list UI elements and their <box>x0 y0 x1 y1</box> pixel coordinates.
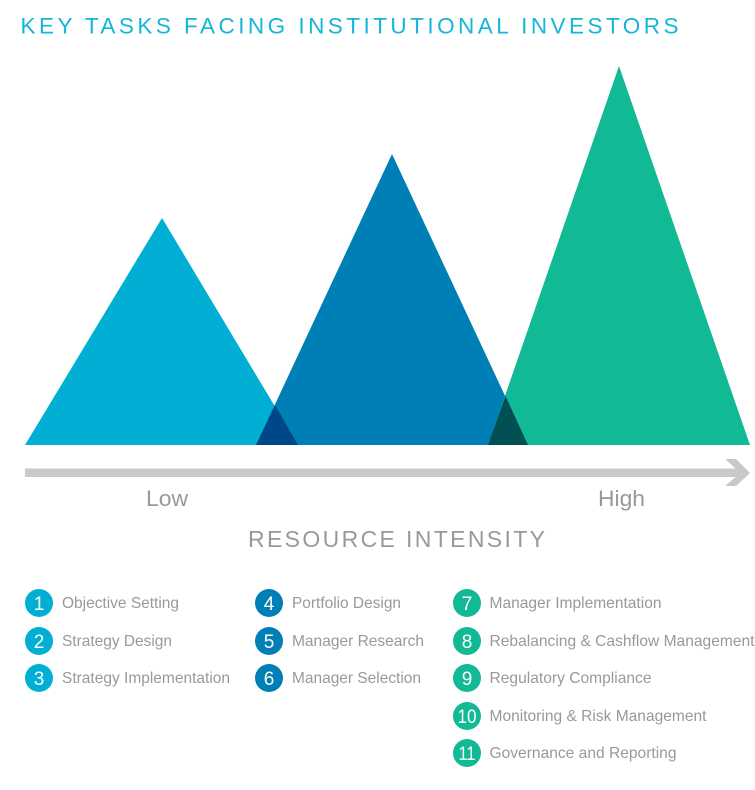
axis label: low: Low <box>146 486 188 511</box>
legend item 4: 4 <box>264 594 275 615</box>
high intensity triangle <box>488 66 750 445</box>
legend column 1 <box>25 589 230 692</box>
axis title: RESOURCE INTENSITY <box>248 526 545 552</box>
legend item 11 <box>453 739 676 767</box>
legend item 10 <box>453 702 707 730</box>
legend item 2: 2 <box>34 632 44 653</box>
legend item 9: Regulatory Compliance <box>490 670 652 687</box>
legend item 9: 9 <box>462 669 472 690</box>
legend item 4: Portfolio Design <box>292 595 401 612</box>
legend column 2 <box>255 589 424 692</box>
legend item 6: Manager Selection <box>292 670 421 687</box>
legend item 6: 6 <box>264 669 274 690</box>
legend item 2 <box>25 627 172 655</box>
legend item 6 <box>255 664 421 692</box>
title: KEY TASKS FACING INSTITUTIONAL INVESTORS <box>20 14 679 38</box>
legend item 4 <box>255 589 401 617</box>
legend item 1: Objective Setting <box>62 595 179 612</box>
axis label: high: High <box>598 486 645 511</box>
legend item 7: Manager Implementation <box>490 595 662 612</box>
legend item 10: 10 <box>458 707 476 728</box>
legend item 1: 1 <box>34 594 44 615</box>
legend item 5: 5 <box>264 632 274 653</box>
legend item 2: Strategy Design <box>62 633 172 650</box>
legend item 3: 3 <box>34 669 44 690</box>
legend item 9 <box>453 664 652 692</box>
legend item 11: 11 <box>458 744 476 765</box>
legend item 8: 8 <box>462 632 472 653</box>
legend item 10: Monitoring & Risk Management <box>490 708 707 725</box>
medium intensity triangle <box>256 154 528 445</box>
legend item 11: Governance and Reporting <box>490 745 676 762</box>
legend item 8: Rebalancing & Cashflow Management <box>490 633 755 650</box>
legend item 7 <box>453 589 662 617</box>
legend item 3: Strategy Implementation <box>62 670 230 687</box>
legend item 3 <box>25 664 230 692</box>
low intensity triangle <box>25 218 298 445</box>
triangle chart <box>25 66 750 445</box>
legend item 5: Manager Research <box>292 633 424 650</box>
legend item 7: 7 <box>462 594 472 615</box>
overlap medium and high <box>488 396 528 445</box>
legend item 1 <box>25 589 179 617</box>
legend item 8 <box>453 627 755 655</box>
overlap low and medium <box>256 405 298 445</box>
arrow: resource intensity axis <box>25 459 750 486</box>
legend column 3 <box>453 589 755 767</box>
legend item 5 <box>255 627 424 655</box>
